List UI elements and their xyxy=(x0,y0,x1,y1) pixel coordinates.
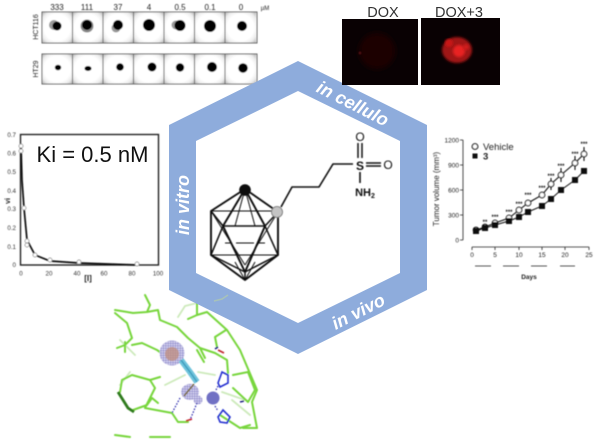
label: in vitro: in vitro xyxy=(173,175,193,235)
concentration labels: 4 xyxy=(147,3,152,12)
x ticks: 10 xyxy=(515,252,523,259)
axes xyxy=(460,140,589,250)
panel: Ki inhibition plot: vi xyxy=(5,198,12,204)
protein ribbons xyxy=(115,295,257,437)
Ki value: Ki = 0.5 nM xyxy=(37,142,148,167)
concentration labels: 333 xyxy=(50,3,64,12)
cell line labels: HCT116 xyxy=(33,14,40,40)
panel: tumor volume chart xyxy=(432,138,593,281)
x ticks: 20 xyxy=(561,252,569,259)
series: compound 3 xyxy=(474,168,586,234)
y ticks: 600 xyxy=(448,188,459,194)
HCT116 row xyxy=(42,12,257,43)
concentration labels: 0.1 xyxy=(204,3,216,12)
molecule: carborane sulfonamide xyxy=(211,130,393,280)
significance stars: *** xyxy=(505,210,513,216)
y axis ticks: 0 xyxy=(13,262,17,269)
data points xyxy=(19,144,139,266)
DOX+3 image xyxy=(421,18,500,85)
hexagon ring xyxy=(169,61,427,354)
y axis ticks: 0.4 xyxy=(7,188,17,195)
y axis ticks: 0.1 xyxy=(7,244,17,251)
legend: Vehicle xyxy=(483,142,514,153)
atom labels: NH xyxy=(355,187,371,199)
panel: tumor volume chart: Days xyxy=(521,274,537,281)
y axis ticks: 0.3 xyxy=(7,206,17,213)
x ticks: 25 xyxy=(585,252,593,259)
atom labels: 2 xyxy=(371,193,375,200)
y axis ticks xyxy=(7,132,17,269)
DOX label: DOX xyxy=(367,5,399,21)
faint background ribbons xyxy=(120,296,250,415)
legend: 3 xyxy=(483,152,488,162)
y ticks: 1200 xyxy=(445,138,459,144)
alkyl chain xyxy=(281,163,381,207)
y axis ticks: 0.7 xyxy=(7,132,17,139)
significance stars: *** xyxy=(538,186,546,192)
x ticks: 15 xyxy=(538,252,546,259)
y ticks: 0 xyxy=(455,238,459,244)
significance stars: *** xyxy=(557,164,565,170)
significance stars: ** xyxy=(483,220,488,226)
x axis ticks xyxy=(19,270,164,278)
histidine rings xyxy=(218,372,230,423)
treatment bars xyxy=(475,265,575,267)
x ticks: 5 xyxy=(493,252,497,259)
inhibitor density mesh xyxy=(160,340,220,404)
oxygen atoms xyxy=(186,350,224,421)
cell line labels: HT29 xyxy=(33,60,40,78)
x axis ticks: 40 xyxy=(74,270,81,278)
grey carbon atom xyxy=(272,206,282,218)
atom labels: S xyxy=(356,159,364,173)
significance stars: *** xyxy=(580,142,588,148)
concentration labels: 111 xyxy=(81,3,94,12)
concentration labels: 0 xyxy=(239,3,244,12)
x axis ticks: 0 xyxy=(19,270,23,278)
axis titles: [I] xyxy=(84,274,92,283)
concentration labels: 37 xyxy=(114,3,123,12)
y axis ticks: 0.2 xyxy=(7,225,17,232)
significance stars: *** xyxy=(524,193,532,199)
concentration labels xyxy=(50,3,269,12)
x axis ticks: 20 xyxy=(46,270,53,278)
panel: fluorescence images xyxy=(342,5,500,85)
y ticks: 900 xyxy=(448,162,459,170)
panel: hexagon xyxy=(169,61,427,354)
atom labels: O xyxy=(355,130,365,144)
y axis ticks: 0.6 xyxy=(7,150,17,158)
sulfonyl double bond xyxy=(358,143,362,158)
hydrogen bonds xyxy=(172,386,218,420)
y axis ticks: 0.5 xyxy=(7,169,17,176)
dark ribbon segment xyxy=(118,392,134,412)
significance stars: *** xyxy=(491,215,499,221)
plot frame xyxy=(20,134,158,265)
x ticks: 0 xyxy=(470,252,474,259)
decay curve xyxy=(21,146,137,265)
label: in vivo: in vivo xyxy=(328,290,388,334)
significance stars: *** xyxy=(571,152,579,158)
cell line labels xyxy=(33,14,40,78)
x axis ticks: 60 xyxy=(101,270,108,278)
DOX image xyxy=(342,19,418,85)
atom labels: O xyxy=(383,158,393,172)
label: in cellulo: in cellulo xyxy=(313,77,392,130)
carborane cage xyxy=(211,189,278,280)
black carbon atom xyxy=(239,184,251,196)
HT29 row xyxy=(42,54,257,84)
concentration labels: 0.5 xyxy=(174,3,186,12)
panel: docking structure xyxy=(115,295,257,437)
atom labels xyxy=(355,130,393,200)
x axis ticks: 80 xyxy=(129,270,136,278)
significance stars: *** xyxy=(547,174,555,180)
y ticks: 300 xyxy=(448,212,459,220)
panel: spheroid assay grid xyxy=(33,3,269,84)
concentration labels: µM xyxy=(261,6,269,12)
panel: Ki inhibition plot xyxy=(5,132,164,283)
significance stars: *** xyxy=(515,202,523,208)
faint strands over ring xyxy=(214,295,228,301)
significance stars xyxy=(483,142,588,226)
series: vehicle xyxy=(473,147,587,233)
DOX+3 label: DOX+3 xyxy=(435,5,483,21)
y ticks xyxy=(445,138,459,244)
axis titles: Tumor volume (mm³) xyxy=(432,151,441,226)
x ticks xyxy=(470,252,593,259)
x axis ticks: 100 xyxy=(153,270,164,278)
legend xyxy=(472,142,514,162)
